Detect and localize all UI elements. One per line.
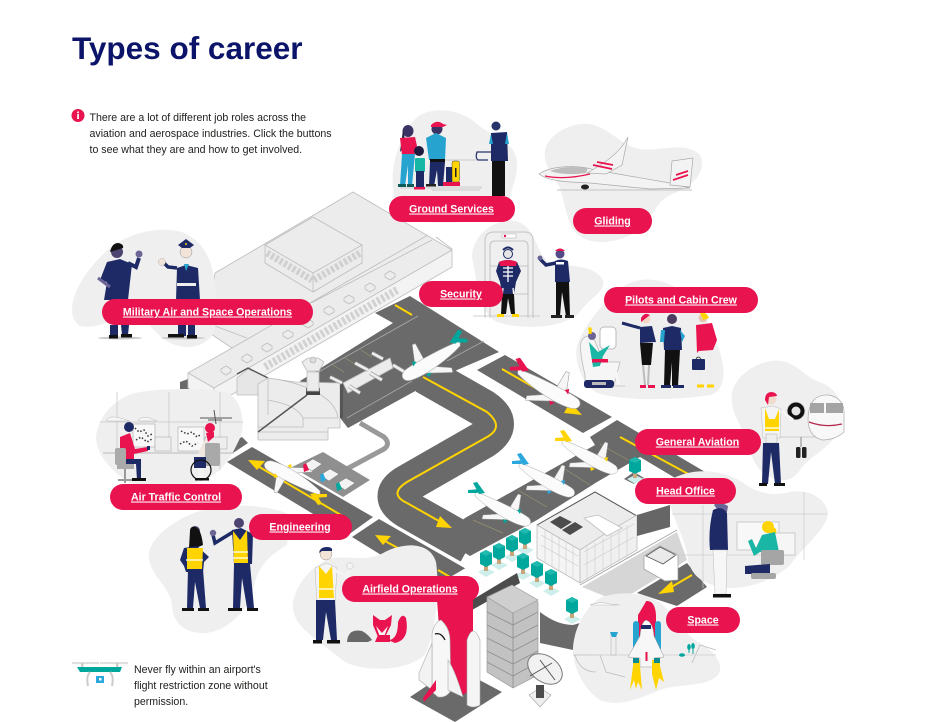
button: Airfield Operations	[342, 576, 479, 602]
drone warning text: Never fly within an airport's	[134, 664, 261, 676]
scene: rocket	[419, 600, 480, 707]
blob: space	[573, 593, 720, 703]
worker	[313, 547, 353, 644]
child	[414, 146, 425, 190]
intro text: aviation and aerospace industries. Click the buttons	[90, 128, 332, 140]
button: Head Office	[635, 478, 736, 504]
man	[426, 122, 447, 186]
scene: space launch	[573, 601, 716, 690]
terminal building	[188, 192, 452, 440]
button: Security	[419, 281, 503, 307]
scene: military	[98, 239, 205, 340]
icon: drone	[72, 663, 128, 686]
blob: security	[472, 221, 603, 327]
button: General Aviation	[635, 429, 761, 455]
plane: parked yellow	[555, 430, 618, 474]
attendant	[622, 314, 656, 388]
head office building	[440, 492, 687, 612]
plane: parked teal	[468, 482, 531, 526]
blob: air traffic control	[96, 389, 243, 487]
button: Gliding: Gliding	[594, 216, 631, 228]
scene: ground services people	[398, 122, 509, 196]
plane: red taxi	[510, 358, 580, 409]
rocket pad	[410, 667, 502, 722]
woman in vest	[180, 526, 209, 611]
button: Air Traffic Control	[110, 484, 242, 510]
steward	[660, 314, 685, 388]
blob: ground services	[393, 110, 517, 223]
planes	[264, 330, 618, 526]
intro text: There are a lot of different job roles across the	[90, 112, 306, 124]
woman	[398, 125, 417, 187]
button: Ground Services	[389, 196, 515, 222]
button: Gliding	[573, 208, 652, 234]
button: Pilots and Cabin Crew: Pilots and Cabin Crew	[625, 294, 738, 306]
scene: air traffic control	[100, 392, 243, 483]
button: Head Office: Head Office	[656, 486, 715, 498]
drone warning text: flight restriction zone without	[134, 680, 268, 692]
passenger	[496, 248, 521, 317]
radar dish	[522, 647, 568, 707]
blob: engineering	[149, 506, 290, 633]
passenger	[588, 329, 625, 386]
blob: head office	[670, 471, 828, 588]
space centre tower and dish	[467, 573, 568, 707]
plane: parked blue	[512, 453, 575, 497]
pilot	[692, 313, 717, 386]
blob: airfield	[293, 545, 438, 669]
blob: military	[72, 230, 217, 347]
agent	[476, 122, 509, 196]
airman	[98, 243, 142, 338]
roof vents	[221, 271, 395, 375]
blob: general aviation	[732, 361, 842, 480]
blob: pilots	[576, 280, 724, 399]
button: Space: Space	[687, 614, 719, 626]
officer	[158, 239, 200, 338]
front wall	[188, 250, 452, 405]
connector block	[237, 369, 268, 395]
scene: general aviation	[759, 392, 844, 486]
button: Space	[666, 607, 740, 633]
scene: pilots and cabin crew	[581, 313, 717, 388]
road markings	[248, 305, 692, 594]
scene: glider	[539, 137, 693, 190]
airport roads	[180, 296, 712, 650]
luggage	[443, 161, 460, 186]
raised roof box	[265, 217, 362, 292]
button: Engineering	[249, 514, 352, 540]
plane: gate	[402, 330, 467, 381]
button: Engineering: Engineering	[269, 522, 331, 534]
roof	[188, 192, 452, 388]
seated woman	[745, 521, 784, 579]
scene: engineering	[180, 518, 258, 611]
controller left	[115, 422, 150, 483]
controller right	[191, 423, 220, 480]
control terminal	[258, 357, 340, 440]
button: Pilots and Cabin Crew	[604, 287, 758, 313]
title: Types of career	[72, 30, 303, 66]
gate pier	[330, 353, 408, 428]
scene: airfield operations	[313, 547, 407, 644]
standing man	[709, 503, 731, 598]
button: Ground Services: Ground Services	[409, 204, 494, 216]
button: Airfield Operations: Airfield Operations	[362, 584, 458, 596]
scene: security	[473, 232, 574, 318]
engineer	[759, 392, 793, 486]
button: Air Traffic Control: Air Traffic Control	[131, 492, 221, 504]
button: Military Air and Space Operations	[102, 299, 313, 325]
blob: gliding	[545, 124, 702, 242]
plane: runway	[264, 461, 327, 505]
button: General Aviation: General Aviation	[656, 436, 739, 448]
fox	[373, 615, 407, 643]
icon: info	[72, 109, 84, 122]
parked vehicles	[303, 459, 355, 491]
button: Military Air and Space Operations: Military Air and Space Operations	[123, 306, 292, 318]
hedgehog	[347, 630, 372, 642]
drone warning text: permission.	[134, 696, 188, 708]
trees	[478, 457, 644, 624]
button: Security: Security	[440, 288, 482, 300]
man in vest	[210, 518, 258, 611]
guard	[538, 248, 574, 318]
scene: head office	[672, 492, 827, 598]
intro text: to see what they are and how to get involved.	[90, 144, 302, 156]
